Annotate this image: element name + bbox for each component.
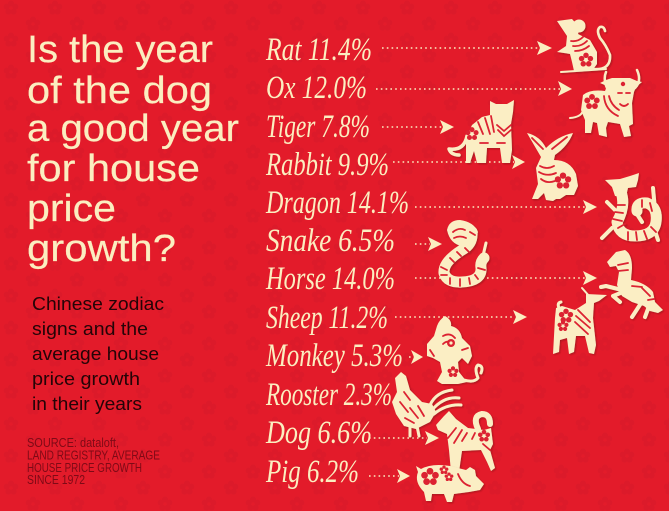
subtitle: signs and the xyxy=(32,318,148,339)
title: Is the year xyxy=(27,29,213,71)
source note: LAND REGISTRY, AVERAGE xyxy=(27,448,160,462)
arrow: Rabbit xyxy=(393,155,525,169)
label: Ox: Ox 12.0% xyxy=(266,70,367,106)
label: Rooster: Rooster 2.3% xyxy=(265,377,392,413)
icon: dragon xyxy=(602,173,658,240)
arrow: Tiger xyxy=(382,120,454,134)
source note xyxy=(27,436,160,487)
icon: monkey xyxy=(427,316,482,384)
subtitle: price growth xyxy=(32,368,140,389)
arrow: Horse xyxy=(415,271,597,285)
label: Monkey: Monkey 5.3% xyxy=(265,338,403,374)
icon: rabbit xyxy=(527,133,578,201)
subtitle: average house xyxy=(32,343,159,364)
title: growth? xyxy=(27,228,176,270)
icon: sheep xyxy=(553,288,607,354)
label: Snake: Snake 6.5% xyxy=(266,223,395,259)
label: Tiger: Tiger 7.8% xyxy=(266,109,370,145)
title: a good year xyxy=(27,108,239,150)
source note: SINCE 1972 xyxy=(27,473,85,487)
icon: ox xyxy=(570,70,642,137)
label: Rat: Rat 11.4% xyxy=(265,32,372,68)
title: for house xyxy=(27,148,200,190)
subtitle: in their years xyxy=(32,393,142,414)
subtitle: Chinese zodiac xyxy=(32,293,164,314)
source note: HOUSE PRICE GROWTH xyxy=(27,461,142,475)
arrow: Sheep xyxy=(395,310,527,324)
label: Sheep: Sheep 11.2% xyxy=(266,300,388,336)
label: Rabbit: Rabbit 9.9% xyxy=(265,147,389,183)
icon: horse xyxy=(601,250,663,317)
source note: SOURCE: dataloft, xyxy=(27,436,119,450)
label: Horse: Horse 14.0% xyxy=(265,261,395,297)
zodiac labels xyxy=(265,32,409,490)
arrow: Rat xyxy=(382,41,552,55)
icon: rooster xyxy=(392,372,461,436)
subtitle xyxy=(32,293,164,414)
title xyxy=(27,29,239,270)
icon: rat xyxy=(557,19,610,72)
label: Dragon: Dragon 14.1% xyxy=(265,185,409,221)
title: of the dog xyxy=(27,70,212,112)
label: Pig: Pig 6.2% xyxy=(265,454,359,490)
arrow: Snake xyxy=(415,237,442,251)
icon: snake xyxy=(441,220,486,286)
arrow: Dragon xyxy=(415,200,597,214)
icon: pig xyxy=(416,465,484,502)
arrow: Ox xyxy=(376,81,572,96)
icon: tiger xyxy=(449,100,514,163)
title: price xyxy=(27,188,116,230)
arrow: Pig xyxy=(369,469,410,483)
icon: dog xyxy=(436,411,495,472)
arrow: Dog xyxy=(369,431,439,445)
label: Dog: Dog 6.6% xyxy=(265,415,372,451)
arrow: Monkey xyxy=(409,350,423,364)
